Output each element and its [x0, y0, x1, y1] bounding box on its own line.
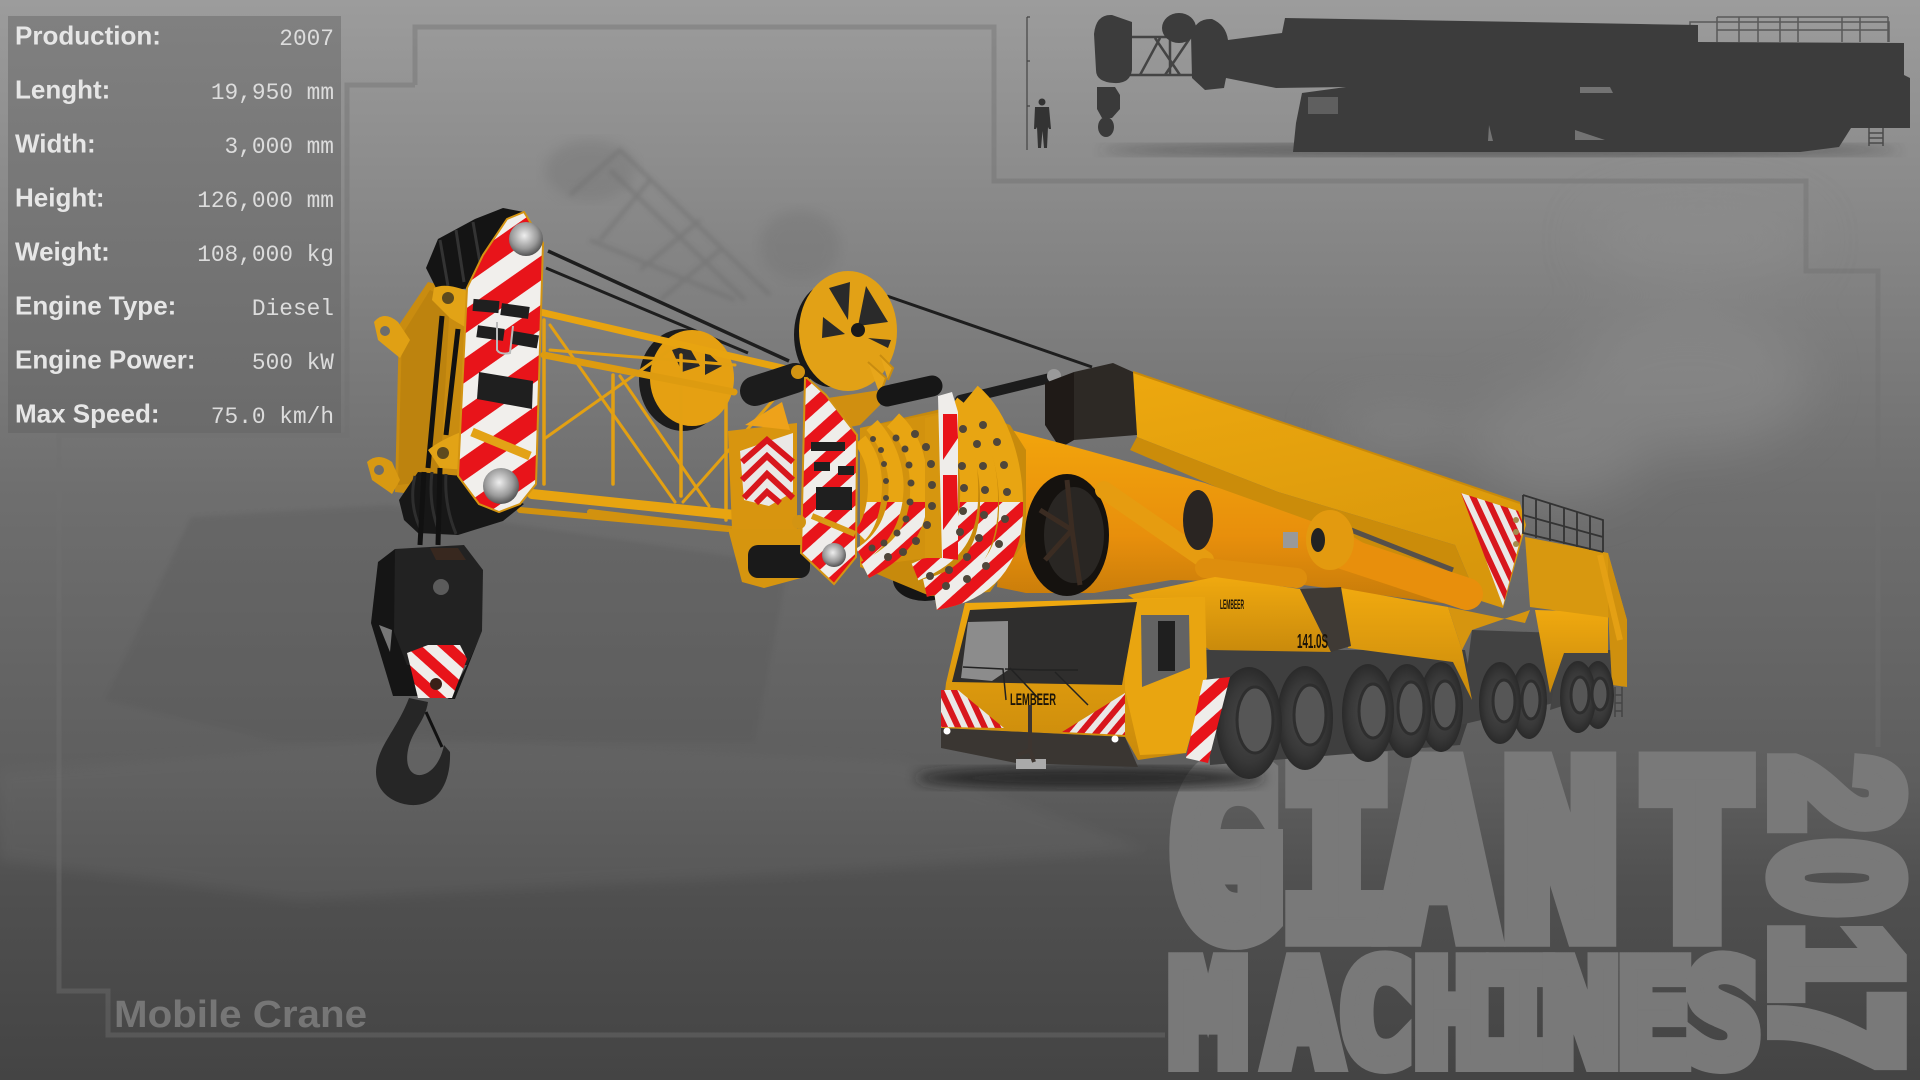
row engine power	[15, 344, 334, 376]
black hoses	[887, 386, 932, 396]
row height: 126,000 mm	[197, 188, 334, 214]
row weight	[15, 236, 334, 268]
collar flange	[925, 414, 942, 558]
row max speed	[15, 398, 334, 430]
collar stripes left	[857, 502, 925, 578]
top sheave stack	[426, 208, 544, 292]
row width	[15, 128, 334, 160]
lower black roller	[748, 545, 810, 578]
inner window	[961, 621, 1008, 681]
truck ground shadow	[915, 767, 1265, 789]
row max speed: 75.0 km/h	[211, 404, 334, 430]
collar base plate front	[860, 412, 942, 567]
cab brand text: LEMBEER	[1010, 690, 1056, 709]
second plate brackets	[811, 442, 854, 510]
number plate	[1016, 759, 1046, 769]
lower black sprocket	[893, 559, 957, 601]
row max speed: Max Speed:	[15, 398, 160, 428]
chevron plate	[740, 433, 793, 506]
front head plate assembly	[728, 271, 897, 588]
wheels	[1216, 661, 1614, 779]
spec panel	[8, 16, 341, 433]
hook plate	[407, 645, 467, 698]
rear tail section	[1608, 553, 1627, 687]
collar arcs left	[860, 420, 919, 570]
truck side panels	[1128, 495, 1627, 717]
row production: Production:	[15, 20, 161, 50]
wipers	[963, 667, 1088, 705]
collars	[860, 392, 1026, 598]
railing silhouette	[1690, 17, 1889, 42]
windshield	[952, 602, 1137, 685]
row engine type	[15, 290, 334, 322]
background clouds	[1330, 200, 1810, 500]
row width: 3,000 mm	[225, 134, 334, 160]
side window	[1141, 615, 1190, 687]
top silhouette elevation	[1027, 13, 1910, 156]
hook	[376, 698, 450, 805]
crane body silhouette	[1094, 13, 1910, 152]
row production: 2007	[279, 26, 334, 52]
body gaps	[1488, 87, 1613, 141]
rear sheave behind lattice	[639, 329, 734, 431]
crane: 141.0S	[1297, 631, 1328, 653]
row engine power: 500 kW	[252, 350, 334, 376]
boom end block	[1045, 363, 1137, 448]
lug	[432, 286, 470, 330]
upper black cylinder	[755, 378, 795, 391]
row length: Lenght:	[15, 74, 110, 104]
hook ropes	[420, 468, 440, 545]
ladder silhouette	[1869, 128, 1883, 146]
row engine type: Engine Type:	[15, 290, 176, 320]
yellow bar	[472, 432, 530, 456]
boom main beam	[1130, 372, 1526, 608]
row production	[15, 20, 334, 52]
collar arcs right	[915, 395, 1011, 598]
lower roller mount	[728, 529, 801, 588]
left warning triangle	[941, 690, 1004, 728]
row engine type: Diesel	[252, 296, 334, 322]
ropes on frame	[428, 316, 458, 468]
striped vertical plate	[938, 392, 958, 560]
person silhouette	[1034, 98, 1051, 148]
headlights	[944, 728, 950, 734]
row height: Height:	[15, 182, 105, 212]
plate brackets	[473, 299, 539, 409]
cab window gap	[1308, 97, 1338, 114]
lug	[428, 430, 466, 470]
row height	[15, 182, 334, 214]
top bolt cap	[509, 222, 543, 256]
row width: Width:	[15, 128, 96, 158]
hook block	[371, 545, 483, 805]
crane	[367, 208, 1627, 805]
top main sheave	[794, 271, 897, 428]
cables from head to boom	[546, 251, 1482, 493]
chevron back panel	[728, 423, 797, 533]
ladder	[1615, 687, 1622, 717]
hook silhouette	[1097, 87, 1120, 137]
collar bolts	[868, 421, 1011, 590]
silhouette shadow	[1100, 144, 1900, 156]
striped head plate	[458, 212, 543, 512]
row weight: Weight:	[15, 236, 110, 266]
ghost crane silhouette in background	[0, 140, 1150, 900]
cab bumper	[941, 728, 1138, 767]
cab: LEMBEER	[1220, 596, 1244, 612]
collar stripes right	[912, 502, 1024, 610]
railing	[1523, 495, 1603, 552]
title: giant: GIANT	[1170, 720, 1753, 988]
rear upper yellow section	[1525, 537, 1627, 620]
right warning triangle	[1062, 693, 1125, 735]
corner warning plate	[1186, 677, 1230, 763]
black disc	[1025, 474, 1109, 596]
row weight: 108,000 kg	[197, 242, 334, 268]
height ruler	[1027, 17, 1030, 150]
collar base	[860, 405, 1026, 596]
hydraulic ram	[1283, 510, 1467, 594]
lattice silhouette	[1130, 37, 1195, 75]
small black pivot	[1183, 490, 1213, 550]
lattice section	[520, 312, 793, 530]
lug	[374, 316, 410, 358]
row engine power: Engine Power:	[15, 344, 196, 374]
beam end bolts	[1513, 517, 1519, 547]
sheave bracket	[828, 390, 880, 428]
lug	[367, 457, 400, 494]
tow hook	[1018, 705, 1034, 762]
beam warning triangle	[1461, 493, 1524, 606]
left head frame	[367, 208, 544, 535]
fins	[868, 355, 893, 395]
striped second plate	[791, 365, 857, 584]
bottom bolt cap	[483, 468, 519, 504]
row length: 19,950 mm	[211, 80, 334, 106]
hydraulic tube	[1104, 490, 1297, 578]
truck chassis	[1205, 630, 1612, 765]
cab	[941, 596, 1328, 769]
bottom sheave stack	[399, 472, 524, 535]
row length	[15, 74, 334, 106]
caption: mobile crane: Mobile Crane	[114, 994, 367, 1036]
main cone body	[997, 430, 1472, 607]
